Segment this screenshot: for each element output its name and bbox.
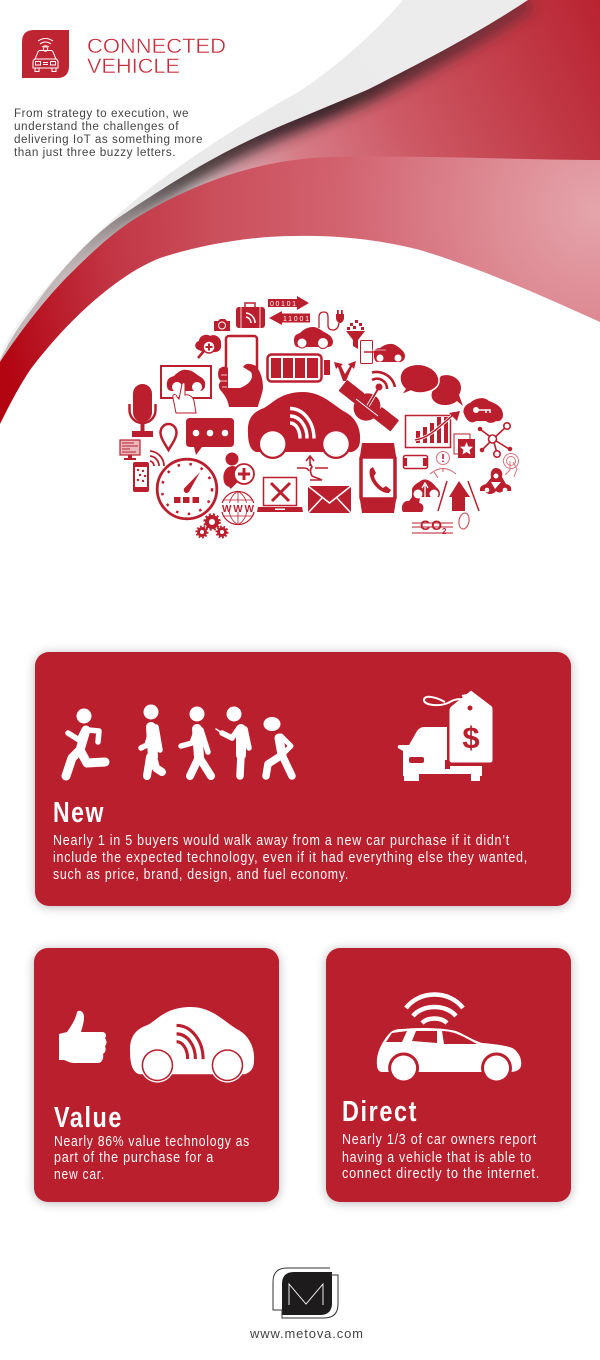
panel: value — [34, 948, 279, 1202]
icon: growth chart — [406, 411, 460, 448]
swoosh: upper red fold — [0, 0, 600, 362]
heading: direct: Direct — [342, 1096, 418, 1128]
icon: CO2: 2 — [442, 527, 447, 536]
background: swoosh header — [0, 0, 600, 430]
icon: coin — [458, 512, 470, 530]
text: value description: Nearly 86% value technology as — [54, 1133, 250, 1150]
icon: microphone — [130, 384, 156, 437]
icon: laptop tools — [257, 478, 303, 512]
icon: satellite — [338, 372, 399, 431]
icon cloud — [120, 296, 518, 538]
text: new description: Nearly 1 in 5 buyers would walk away from a new car purchase if it didn’t — [53, 832, 510, 849]
intro paragraph — [14, 108, 203, 159]
icon: phone to car — [360, 340, 405, 364]
icon: handheld device — [403, 456, 428, 468]
text: direct description: having a vehicle that is able to — [342, 1149, 532, 1166]
icon: camera — [214, 319, 230, 331]
swoosh: grey sheet — [0, 0, 600, 380]
icon: data arrows: 11001 — [283, 316, 309, 323]
text: new description: such as price, brand, design, and fuel economy. — [53, 866, 349, 883]
icon: cloud car — [402, 480, 440, 512]
icon: suv — [377, 1028, 521, 1084]
icon: phone watch — [360, 443, 396, 513]
heading: new: New — [53, 797, 105, 829]
icon: wifi small — [150, 451, 164, 466]
icon: five walking people — [66, 704, 292, 776]
text: direct description: connect directly to the internet. — [342, 1165, 540, 1182]
icon: star cards — [454, 434, 475, 458]
icon: smart watch — [133, 462, 149, 492]
icon: connected cars — [480, 468, 511, 494]
icon: suitcase — [236, 303, 265, 328]
icon: car with price tag: $ — [462, 720, 480, 755]
icon: small car — [294, 327, 333, 348]
text: value description: part of the purchase for a — [54, 1149, 214, 1166]
icon: chat bubble — [186, 418, 234, 455]
logo: metova — [273, 1268, 338, 1318]
icon: data arrows — [268, 296, 310, 325]
intro paragraph: From strategy to execution, we — [14, 108, 189, 120]
icon: car key — [463, 398, 503, 423]
intro paragraph: understand the challenges of — [14, 121, 179, 133]
icon: CO2 — [412, 517, 453, 536]
icon: phone in hand — [218, 336, 263, 407]
icon: network nodes — [478, 423, 512, 457]
icon: wifi waves — [406, 994, 463, 1023]
icon: alert gauge — [430, 452, 456, 478]
icon: speedometer — [157, 459, 217, 519]
intro paragraph: delivering IoT as something more — [14, 134, 203, 146]
panel: direct — [326, 948, 571, 1202]
text: new description — [53, 832, 528, 883]
heading: value: Value — [54, 1102, 123, 1134]
icon: www globe: WWW — [222, 504, 255, 515]
icon: plug — [319, 310, 344, 330]
panel: new — [35, 652, 571, 906]
icon: battery — [268, 354, 330, 382]
intro paragraph: than just three buzzy letters. — [14, 147, 176, 159]
icon: person search — [223, 452, 254, 488]
icon: speech bubbles — [400, 364, 463, 406]
text: value description — [54, 1133, 250, 1183]
icon: touch — [504, 454, 518, 477]
icon: touch car tablet — [161, 366, 211, 413]
text: direct description — [342, 1131, 540, 1182]
icon: data funnel — [346, 320, 365, 349]
title — [87, 34, 226, 78]
icon: connected car white — [130, 1007, 254, 1083]
icon: CO2: CO — [420, 517, 442, 533]
icon: data arrows: 00101 — [270, 301, 296, 308]
icon: thumbs up — [59, 1011, 106, 1063]
icon: location pin — [160, 424, 176, 450]
icon: route arrow — [297, 456, 328, 480]
icon: V2V arrows — [334, 361, 356, 381]
title: CONNECTED — [87, 34, 226, 58]
icon: cloud magnifier — [195, 335, 221, 358]
icon: car with price tag — [398, 690, 493, 781]
icon: envelope — [308, 486, 351, 513]
icon: www globe — [221, 492, 255, 524]
title: VEHICLE — [87, 54, 180, 78]
logo badge: connected vehicle — [22, 30, 69, 78]
icon: connected car large — [248, 392, 360, 459]
website url: www.metova.com — [249, 1326, 363, 1341]
text: value description: new car. — [54, 1166, 105, 1183]
icon: monitor — [120, 440, 140, 460]
icon: road — [438, 481, 479, 511]
icon: gears — [196, 514, 228, 538]
text: direct description: Nearly 1/3 of car owners report — [342, 1131, 537, 1148]
swoosh: lower red band — [0, 157, 600, 424]
